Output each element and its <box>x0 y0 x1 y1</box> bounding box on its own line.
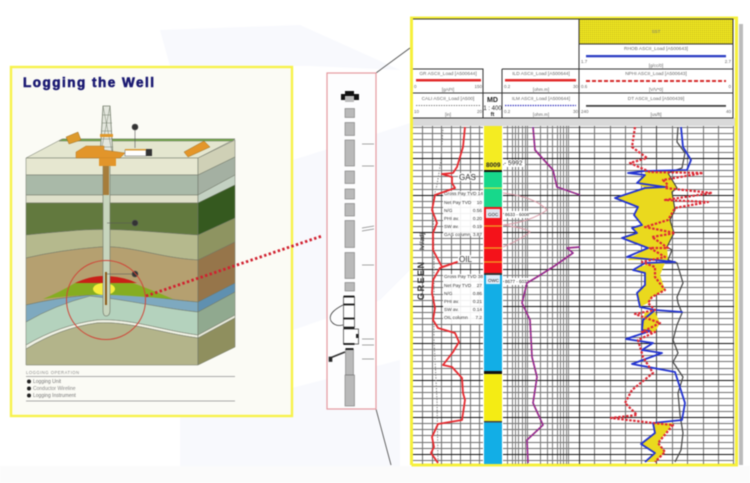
header: ILM: ILM ASCII_Load [A500644] <box>512 96 570 102</box>
header: ILD: [ohm.m] <box>533 87 549 92</box>
formation notes: SW av. <box>444 307 459 312</box>
dotted connector arrow <box>146 236 322 296</box>
header: ILD: 0.2 <box>504 84 511 89</box>
track 2 resistivity overlay <box>503 193 547 247</box>
lithology column <box>483 126 503 464</box>
header: NPHI: 0 <box>728 84 731 89</box>
depth marks: - 5992 <box>504 160 523 167</box>
formation notes: 10 <box>477 200 482 205</box>
header: NPHI: 0.6 <box>581 84 588 89</box>
formation notes: 27 <box>477 283 482 288</box>
log grid <box>413 126 734 464</box>
depth marks: 8677 - 6033 <box>505 279 530 284</box>
depth marks <box>486 160 530 285</box>
depth marks: 8633 - 6008 <box>505 212 530 217</box>
formation notes: Gross Pay TVD 38 <box>444 274 483 279</box>
zone labels: lvl/adj <box>420 233 426 250</box>
header: ILD <box>504 71 578 92</box>
legend: Logging Instrument <box>33 393 76 399</box>
header: GR: 0 <box>414 84 417 89</box>
formation notes: GAS column <box>444 232 471 237</box>
header: DT: [us/ft] <box>650 112 662 117</box>
block diagram: earth layers <box>26 139 235 365</box>
curve: gamma ray <box>431 127 465 463</box>
header: ILM: 0.2 <box>504 109 511 114</box>
header: GR: [gAPI] <box>442 87 454 92</box>
formation notes: Gross Pay TVD 14 <box>444 191 483 196</box>
frame border <box>412 18 736 465</box>
header: RHOB: 1.7 <box>581 59 588 64</box>
callout markers <box>107 124 138 277</box>
formation notes: N/G <box>444 291 453 296</box>
header: ILD: 30 <box>573 84 578 89</box>
formation notes: 0.19 <box>473 224 482 229</box>
header: RHOB: RHOB ASCII_Load [A500643] <box>624 46 688 52</box>
depth ticks <box>362 144 374 359</box>
surface rig and derrick <box>66 106 210 166</box>
formation notes: 0.20 <box>473 216 482 221</box>
header: CALI: 20 <box>477 109 482 114</box>
header: CALI: [in] <box>445 112 451 117</box>
legend <box>26 370 235 401</box>
zone labels <box>416 173 476 300</box>
formation notes: 7.2 <box>475 315 482 320</box>
header: ILD: ILD ASCII_Load [A500644] <box>512 71 570 77</box>
frame shadow <box>739 24 743 465</box>
header: depth: ft <box>491 112 494 118</box>
zone tag: SST <box>652 29 661 34</box>
header: NPHI <box>581 71 731 92</box>
header: depth: 1 : 400 <box>483 106 502 112</box>
gas and oil reservoir <box>43 276 173 299</box>
header: CALI: CALI ASCII_Load [A500] <box>422 96 474 102</box>
formation notes: OIL column <box>444 315 468 320</box>
formation notes: Net Pay TVD <box>444 200 472 205</box>
header: depth <box>483 97 502 118</box>
legend: Conductor Wireline <box>33 386 76 392</box>
well bore <box>103 165 110 316</box>
panel: logging the well <box>11 67 292 416</box>
legend: LOGGING OPERATION <box>26 370 80 375</box>
header: GR <box>414 71 482 92</box>
depth marks: 8009 <box>486 162 501 169</box>
header: RHOB: [g/cc/0] <box>649 63 663 68</box>
formation notes: 0.14 <box>473 307 482 312</box>
header: CALI <box>414 96 482 117</box>
curve: caliper <box>433 127 443 463</box>
depth marks: GOC <box>488 212 499 217</box>
tool sections <box>345 108 354 406</box>
formation notes: PHI av. <box>444 216 459 221</box>
formation notes: SW av. <box>444 224 459 229</box>
panel: well log <box>412 18 743 465</box>
header: RHOB: 2.7 <box>725 59 731 64</box>
log header <box>413 19 733 118</box>
zone labels: OIL <box>459 255 472 264</box>
curve: resistivity <box>522 127 580 463</box>
panel: tool string <box>327 73 376 409</box>
formation notes: Net Pay TVD <box>444 283 472 288</box>
header: CALI: 10 <box>414 109 420 114</box>
header: NPHI: NPHI ASCII_Load [A500643] <box>625 71 687 77</box>
header: NPHI: [V/V*0] <box>649 87 663 92</box>
header: DT: 40 <box>726 109 731 114</box>
zone labels: GAS <box>459 173 476 182</box>
curve: density <box>615 127 691 462</box>
logging instrument <box>105 272 107 305</box>
header: DT: DT ASCII_Load [A500439] <box>628 96 684 102</box>
tool head <box>341 91 359 102</box>
zone labels: GREEN <box>416 260 426 300</box>
formation notes: 0.86 <box>473 291 482 296</box>
curve: neutron <box>611 127 712 462</box>
tool connectors <box>329 297 358 362</box>
header: DT <box>581 96 731 117</box>
header: RHOB <box>581 46 731 68</box>
curve: sonic <box>667 127 685 462</box>
red detail circle <box>66 260 146 340</box>
header: GR: GR ASCII_Load [A500644] <box>419 71 477 77</box>
formation notes: N/G <box>444 208 453 213</box>
legend: Logging Unit <box>33 379 62 385</box>
connector lines to log <box>376 48 410 465</box>
formation notes: 3.87 <box>473 232 482 237</box>
header: DT: 240 <box>581 109 589 114</box>
depth marks: OWC <box>488 278 500 283</box>
header: GR: 150 <box>474 84 482 89</box>
formation notes: 0.21 <box>473 299 482 304</box>
header: depth: MD <box>487 97 498 104</box>
formation notes <box>443 191 483 324</box>
header: ILM: 30 <box>573 109 578 114</box>
header: ILM <box>504 96 578 117</box>
formation notes: 0.56 <box>473 208 482 213</box>
header: ILM: [ohm.m] <box>533 112 549 117</box>
yellow pay shading <box>615 171 687 462</box>
title: Logging the Well <box>23 75 154 90</box>
formation notes: PHI av. <box>444 299 459 304</box>
